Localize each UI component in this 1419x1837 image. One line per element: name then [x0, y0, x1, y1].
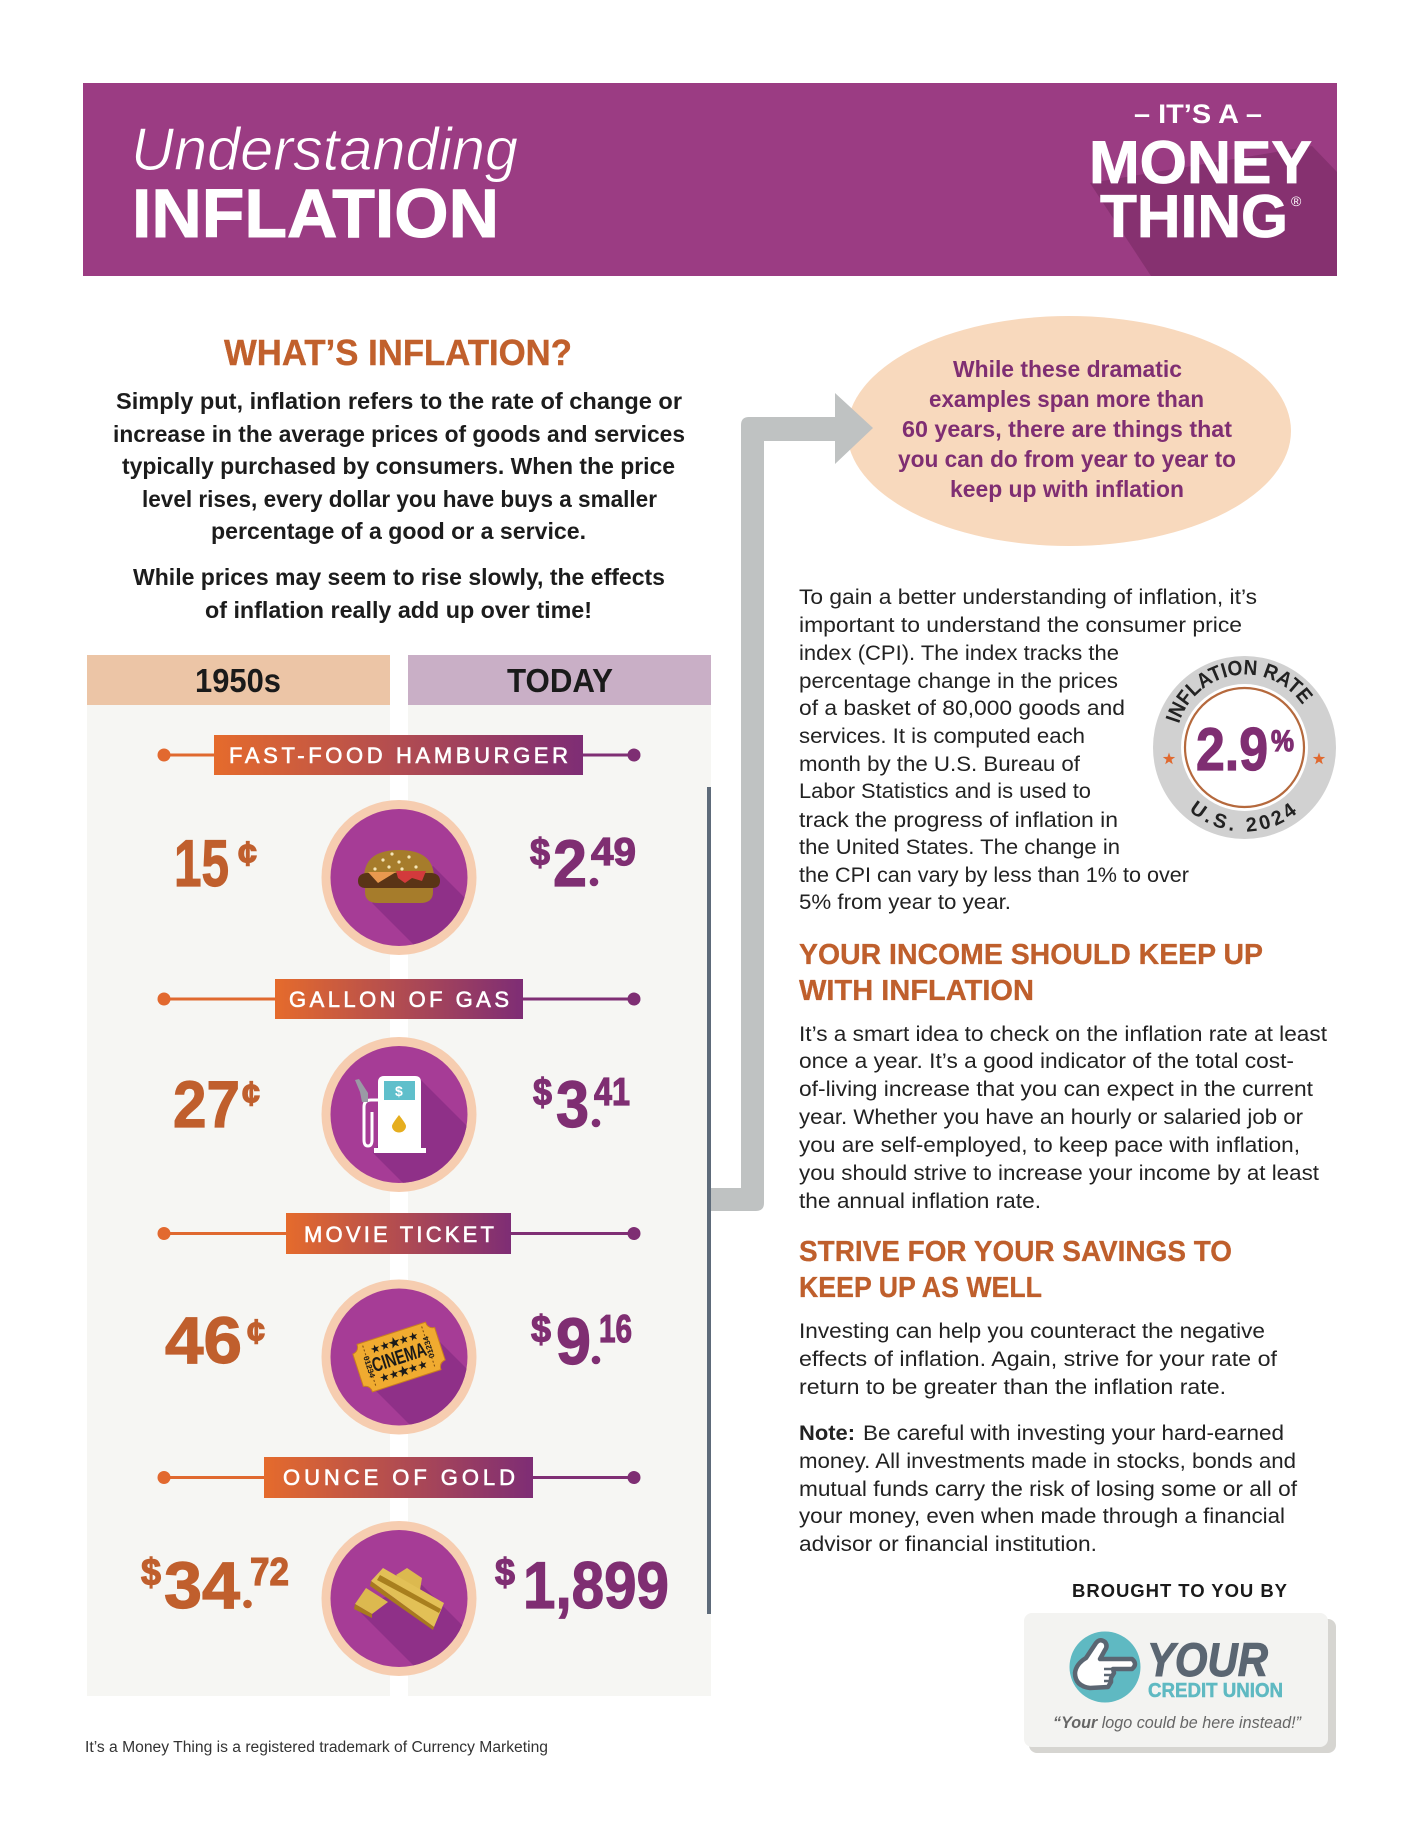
title: Understanding	[131, 116, 518, 183]
icon: hamburger	[322, 800, 476, 955]
logo long shadow	[1090, 146, 1337, 276]
price: $34.72: $	[141, 1552, 161, 1594]
price: 15 cents: 15	[174, 826, 229, 900]
CPI text block: 5% from year to year.	[799, 891, 1011, 914]
savings text block: Investing can help you counteract the negative	[799, 1320, 1265, 1343]
sponsor card	[1024, 1613, 1336, 1753]
icon: cinema ticket: 01234	[361, 1355, 377, 1379]
price: $2.49	[530, 826, 636, 900]
price: 27 cents: 27	[173, 1067, 240, 1141]
logo: It's a Money Thing	[1089, 99, 1312, 250]
note text block: money. All investments made in stocks, bonds and	[799, 1450, 1296, 1473]
CPI text block: index (CPI). The index tracks the	[799, 642, 1119, 665]
intro text block: level rises, every dollar you have buys a smaller	[142, 486, 657, 512]
CPI text block: month by the U.S. Bureau of	[799, 753, 1080, 776]
icon: cinema ticket	[322, 1280, 476, 1434]
header banner	[83, 83, 1337, 276]
logo wordmark: CREDIT UNION	[1148, 1680, 1283, 1702]
panel: price comparison	[87, 655, 711, 1707]
row label: movie ticket	[158, 1213, 640, 1254]
price: $2.49: 2	[553, 826, 587, 900]
logo: It's a Money Thing: THING	[1100, 183, 1288, 250]
column header: today	[408, 655, 711, 705]
heading: savings	[799, 1236, 1232, 1304]
income text block: you are self-employed, to keep pace with inflation,	[799, 1134, 1300, 1157]
intro text block: typically purchased by consumers. When the price	[122, 453, 675, 479]
logo tagline: “Your logo could be here instead!”	[1053, 1713, 1302, 1732]
icon: gas pump: $	[395, 1083, 403, 1099]
income text block	[799, 1023, 1327, 1213]
callout oval: keep up with inflation	[950, 476, 1184, 502]
note text block: your money, even when made through a financial	[799, 1505, 1285, 1528]
callout oval: you can do from year to year to	[898, 446, 1236, 472]
callout oval: 60 years, there are things that	[902, 416, 1232, 442]
icon: cinema ticket: 01234	[421, 1335, 437, 1359]
row label: gallon of gas: GALLON OF GAS	[289, 987, 509, 1012]
badge: inflation rate: INFLATION RATE	[1166, 660, 1314, 723]
intro text block: of inflation really add up over time!	[205, 597, 592, 623]
note text block: Be careful with investing your hard-earned	[863, 1422, 1284, 1445]
income text block: year. Whether you have an hourly or salaried job or	[799, 1106, 1303, 1129]
intro text block: percentage of a good or a service.	[211, 518, 586, 544]
heading: savings: STRIVE FOR YOUR SAVINGS TO	[799, 1236, 1232, 1268]
price: $9.16: 9	[556, 1304, 591, 1378]
note text block: advisor or financial institution.	[799, 1533, 1097, 1556]
row label: ounce of gold: OUNCE OF GOLD	[283, 1465, 515, 1490]
intro text block: increase in the average prices of goods and services	[113, 421, 685, 447]
row label: movie ticket: MOVIE TICKET	[304, 1222, 494, 1247]
intro text block: While prices may seem to rise slowly, the effects	[133, 564, 665, 590]
CPI text block: percentage change in the prices	[799, 670, 1118, 693]
price: 15 cents: ¢	[238, 835, 257, 873]
title: INFLATION	[132, 175, 499, 252]
note text block: Note:	[799, 1422, 855, 1445]
CPI text block: Labor Statistics and is used to	[799, 780, 1091, 803]
logo: It's a Money Thing: – IT’S A –	[1134, 99, 1262, 129]
badge: inflation rate: %	[1271, 725, 1294, 758]
CPI text block: the CPI can vary by less than 1% to over	[799, 864, 1189, 887]
badge: inflation rate: 2.9	[1196, 716, 1268, 783]
price: $3.41: $	[533, 1072, 552, 1114]
brought to you by: BROUGHT TO YOU BY	[1072, 1580, 1288, 1601]
income text block: you should strive to increase your income by at least	[799, 1162, 1319, 1185]
intro text block: Simply put, inflation refers to the rate of change or	[116, 388, 682, 414]
row label: fast-food hamburger	[158, 735, 640, 775]
icon: pointing hand logo	[1070, 1632, 1140, 1702]
badge: inflation rate	[1153, 656, 1336, 839]
savings text block: return to be greater than the inflation rate.	[799, 1376, 1226, 1399]
CPI text block	[799, 586, 1257, 914]
savings text block: effects of inflation. Again, strive for your rate of	[799, 1348, 1277, 1371]
heading: income: WITH INFLATION	[799, 975, 1034, 1007]
footer note: It’s a Money Thing is a registered trademark of Currency Marketing	[85, 1739, 548, 1756]
row label: ounce of gold	[158, 1457, 640, 1498]
callout oval: examples span more than	[929, 386, 1204, 412]
income text block: once a year. It’s a good indicator of the total cost-	[799, 1050, 1294, 1073]
CPI text block: the United States. The change in	[799, 836, 1120, 859]
price: $1,899: $	[495, 1552, 515, 1594]
row label: fast-food hamburger: FAST-FOOD HAMBURGER	[229, 743, 568, 768]
price: 46 cents: ¢	[247, 1313, 265, 1351]
price: $2.49: 49	[591, 831, 636, 874]
icon: cinema ticket: CINEMA	[369, 1339, 429, 1377]
logo wordmark: YOUR	[1147, 1633, 1268, 1686]
arrow	[711, 393, 873, 1211]
price: $34.72	[141, 1548, 289, 1622]
income text block: of-living increase that you can expect in the current	[799, 1078, 1313, 1101]
icon: gold bars	[322, 1521, 476, 1676]
price: 27 cents: ¢	[242, 1075, 260, 1113]
CPI text block: track the progress of inflation in	[799, 809, 1118, 832]
CPI text block: To gain a better understanding of inflation, it’s	[799, 586, 1257, 609]
row label: gallon of gas	[158, 979, 640, 1019]
column header: 1950s	[87, 655, 390, 705]
title	[131, 116, 518, 252]
price: $34.72: 34	[164, 1548, 240, 1622]
income text block: It’s a smart idea to check on the inflation rate at least	[799, 1023, 1327, 1046]
icon: gas pump	[322, 1037, 476, 1192]
price: $9.16: $	[531, 1309, 551, 1351]
price: $1,899: 1,899	[523, 1548, 669, 1622]
heading: income	[799, 939, 1263, 1007]
price: $3.41: 3	[556, 1067, 589, 1141]
callout oval: While these dramatic	[953, 356, 1182, 382]
logo: It's a Money Thing: ®	[1291, 193, 1302, 209]
price: $3.41: 41	[594, 1071, 630, 1114]
CPI text block: services. It is computed each	[799, 725, 1085, 748]
note text block: mutual funds carry the risk of losing some or all of	[799, 1478, 1297, 1501]
price: $2.49: $	[530, 832, 550, 874]
savings text block	[799, 1320, 1277, 1399]
note text block	[799, 1422, 1297, 1556]
CPI text block: of a basket of 80,000 goods and	[799, 697, 1125, 720]
price: $9.16: 16	[599, 1308, 632, 1351]
intro text block	[113, 388, 685, 623]
price: $3.41	[533, 1067, 630, 1141]
heading: savings: KEEP UP AS WELL	[799, 1272, 1042, 1304]
column header: 1950s: 1950s	[195, 662, 281, 699]
column header: today: TODAY	[507, 662, 613, 699]
badge: inflation rate: U.S. 2024	[1191, 800, 1296, 832]
income text block: the annual inflation rate.	[799, 1190, 1041, 1213]
callout oval	[847, 316, 1291, 546]
price: $34.72: 72	[250, 1551, 289, 1594]
heading: income: YOUR INCOME SHOULD KEEP UP	[799, 939, 1263, 971]
logo: It's a Money Thing: MONEY	[1089, 129, 1312, 196]
CPI text block: important to understand the consumer price	[799, 614, 1242, 637]
price: $9.16	[531, 1304, 632, 1378]
price: 46 cents: 46	[165, 1303, 242, 1377]
heading: what's inflation: WHAT’S INFLATION?	[224, 332, 572, 373]
